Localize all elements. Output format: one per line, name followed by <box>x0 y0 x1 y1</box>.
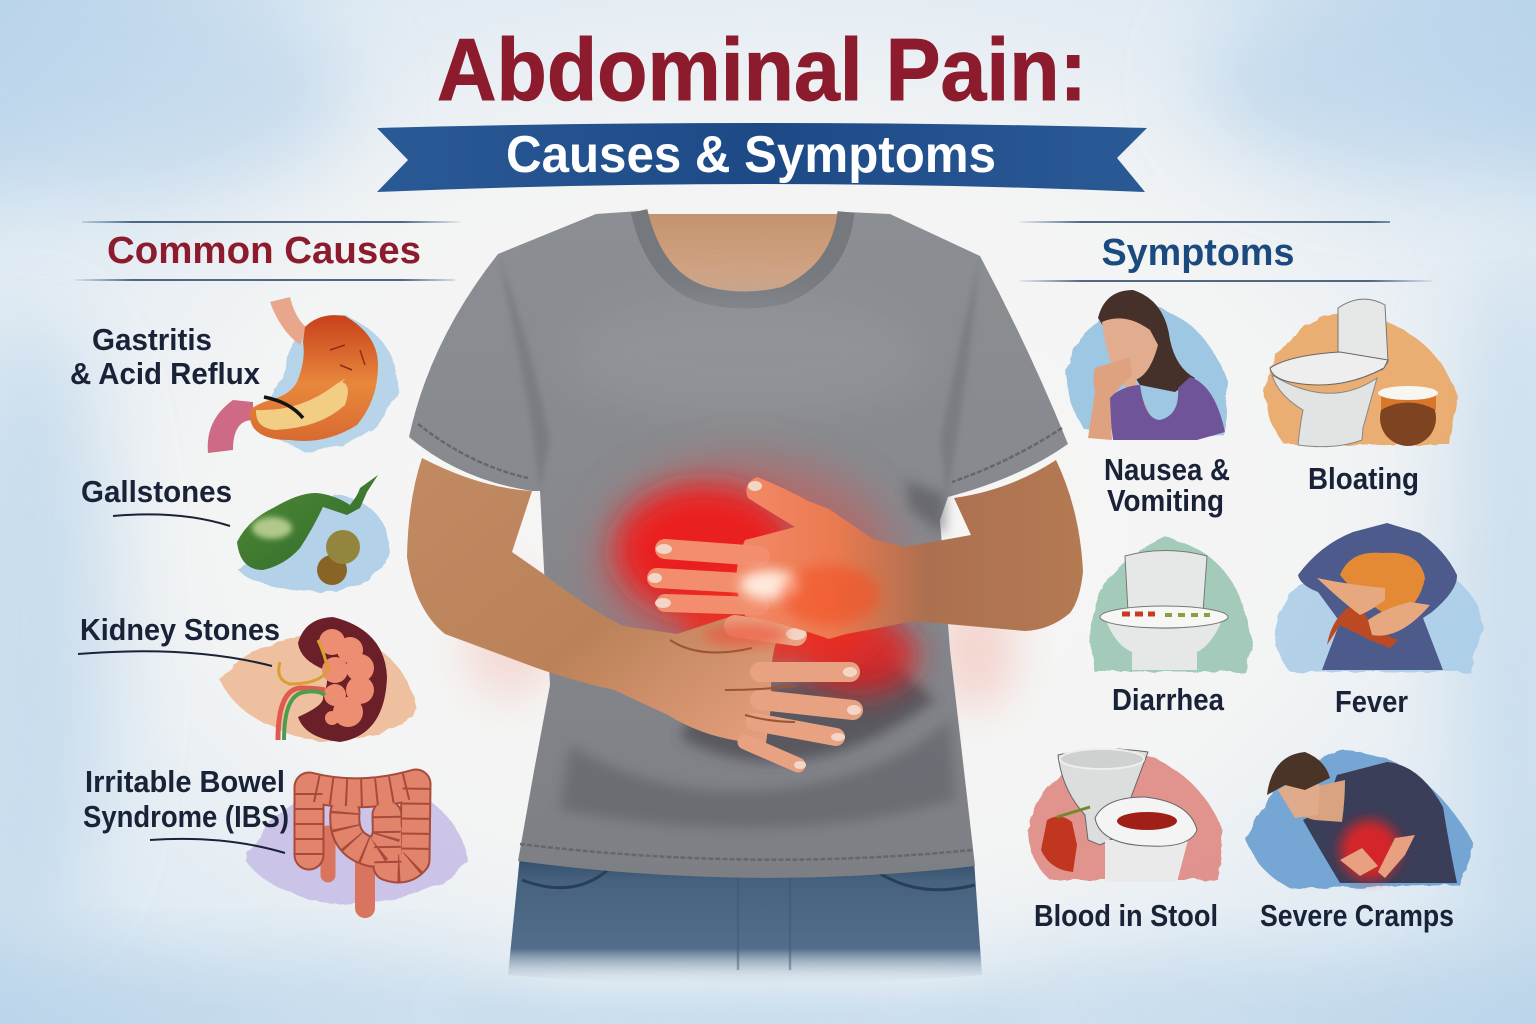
symptom: bloating <box>1265 299 1457 496</box>
t-shirt <box>409 211 1068 878</box>
upper hand fingers <box>657 549 760 606</box>
neck <box>625 214 862 315</box>
cause: gastritis <box>70 297 398 453</box>
right arm and upper hand <box>648 460 1083 639</box>
label: gastritis: & Acid Reflux <box>70 356 261 391</box>
label: nausea and vomiting: Nausea & <box>1104 452 1230 487</box>
label: nausea and vomiting: Vomiting <box>1107 483 1224 518</box>
label: diarrhea: Diarrhea <box>1112 682 1225 717</box>
heading: common causes: Common Causes <box>107 230 421 272</box>
label: blood in stool: Blood in Stool <box>1034 898 1218 933</box>
banner text: Causes & Symptoms <box>506 126 996 184</box>
background red aura <box>465 580 1015 710</box>
symptom: blood in stool <box>1028 748 1223 933</box>
heading: symptoms: Symptoms <box>1102 232 1294 274</box>
label: irritable bowel syndrome: Syndrome (IBS) <box>83 799 289 834</box>
shirt shading <box>418 211 1062 860</box>
central figure <box>407 211 1083 985</box>
cause: kidney stones <box>78 612 418 742</box>
jeans <box>508 855 982 985</box>
cause: gallstones <box>81 474 390 592</box>
title: Abdominal Pain: <box>437 20 1087 119</box>
red pain glow <box>595 460 918 695</box>
symptom: nausea and vomiting <box>1067 290 1230 518</box>
label: gastritis: Gastritis <box>92 322 212 357</box>
label: kidney stones: Kidney Stones <box>80 612 280 647</box>
cause: irritable bowel syndrome <box>83 764 468 908</box>
heading: symptoms <box>1020 222 1432 281</box>
lower hand fingers <box>735 626 853 765</box>
symptom: fever <box>1275 523 1483 719</box>
banner <box>377 123 1147 192</box>
left arm and lower hand <box>407 458 861 769</box>
symptom: diarrhea <box>1090 537 1252 717</box>
label: severe cramps: Severe Cramps <box>1260 898 1454 933</box>
heading: common causes <box>75 222 460 280</box>
label: irritable bowel syndrome: Irritable Bowel <box>85 764 285 799</box>
label: fever: Fever <box>1335 684 1408 719</box>
symptom: severe cramps <box>1247 750 1475 933</box>
label: bloating: Bloating <box>1308 461 1419 496</box>
label: gallstones: Gallstones <box>81 474 232 509</box>
